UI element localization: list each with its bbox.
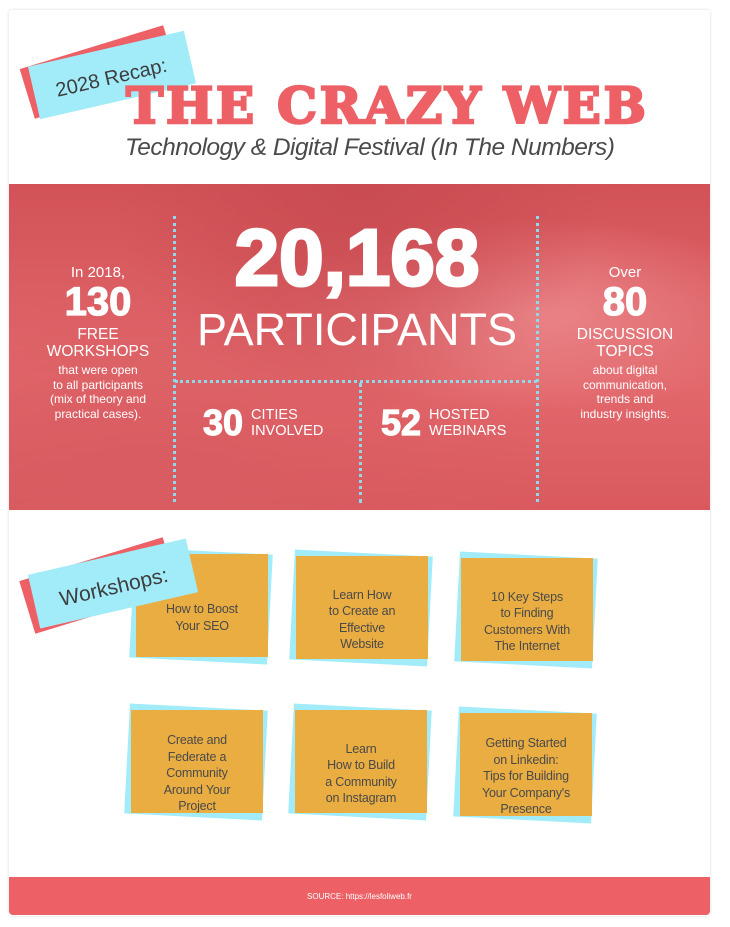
card: community: Around Your	[164, 783, 230, 797]
stat: topics	[577, 264, 673, 420]
stat: workshops: WORKSHOPS	[47, 343, 149, 360]
card: linkedin: Presence	[500, 802, 552, 816]
panel: stats photo	[9, 184, 710, 510]
stat: workshops: In 2018,	[71, 264, 125, 281]
card: customers: to Finding	[501, 606, 553, 620]
card: website: to Create an	[329, 604, 395, 618]
footer: SOURCE: https://lesfoliweb.fr	[307, 892, 412, 900]
stat: topics: industry insights.	[580, 406, 670, 420]
card: community	[124, 704, 268, 820]
card: customers: 10 Key Steps	[491, 590, 563, 604]
card: community: Federate a	[168, 750, 226, 764]
stat: participants: 20,168	[235, 213, 479, 302]
card: SEO	[129, 550, 273, 664]
card: instagram: on Instagram	[326, 791, 396, 805]
stat: webinars: WEBINARS	[429, 423, 506, 439]
card: linkedin: Getting Started	[485, 736, 567, 750]
stat: webinars	[381, 402, 506, 443]
stat: topics: about digital	[593, 363, 657, 377]
stat: workshops: (mix of theory and	[50, 392, 146, 406]
card: linkedin	[453, 706, 597, 824]
stat: workshops: that were open	[58, 363, 138, 377]
stat: workshops: to all participants	[53, 378, 143, 392]
card: community: Community	[166, 766, 228, 780]
card: SEO: How to Boost	[166, 602, 238, 616]
header: recap tag	[20, 25, 196, 120]
stat: workshops: 130	[65, 280, 131, 324]
card: website	[289, 550, 433, 666]
stat: cities: 30	[203, 402, 243, 443]
stat: webinars: 52	[381, 402, 421, 443]
card: instagram: How to Build	[327, 758, 395, 772]
card: customers: The Internet	[494, 639, 560, 653]
card: SEO: Your SEO	[175, 618, 229, 632]
header: recap tag: 2028 Recap:	[54, 54, 169, 101]
card: linkedin: Tips for Building	[483, 769, 569, 783]
title: THE CRAZY WEB	[126, 76, 649, 135]
footer	[9, 877, 710, 915]
card: instagram: Learn	[346, 742, 376, 756]
stat: topics: trends and	[597, 392, 653, 406]
stat: topics: 80	[603, 280, 647, 324]
card: community: Project	[178, 799, 216, 813]
stat: topics: communication,	[583, 378, 667, 392]
stat: cities: CITIES	[251, 407, 298, 423]
stat: cities: INVOLVED	[251, 423, 323, 439]
stat: topics: DISCUSSION	[577, 326, 673, 343]
card: linkedin: Your Company's	[482, 786, 570, 800]
stat: topics: TOPICS	[596, 343, 654, 360]
card: community: Create and	[167, 733, 227, 747]
card: linkedin: on Linkedin:	[493, 753, 558, 767]
card: website: Website	[340, 637, 384, 651]
stat: participants	[197, 213, 517, 355]
stat: webinars: HOSTED	[429, 407, 489, 423]
card: instagram	[288, 704, 432, 820]
stat: participants: PARTICIPANTS	[197, 304, 517, 355]
stat: cities	[203, 402, 323, 443]
stat: topics: Over	[609, 264, 641, 281]
workshops tag	[19, 537, 198, 634]
stat: workshops	[46, 264, 149, 420]
card: instagram: a Community	[325, 774, 397, 788]
card: website: Learn How	[333, 588, 391, 602]
stat: workshops: practical cases).	[55, 406, 141, 420]
card: customers: Customers With	[484, 622, 570, 636]
card: customers	[454, 552, 598, 668]
subtitle: Technology & Digital Festival (In The Numbers)	[125, 134, 614, 161]
stat: workshops: FREE	[77, 326, 119, 343]
workshops tag: Workshops:	[57, 563, 170, 611]
card: website: Effective	[339, 620, 385, 634]
